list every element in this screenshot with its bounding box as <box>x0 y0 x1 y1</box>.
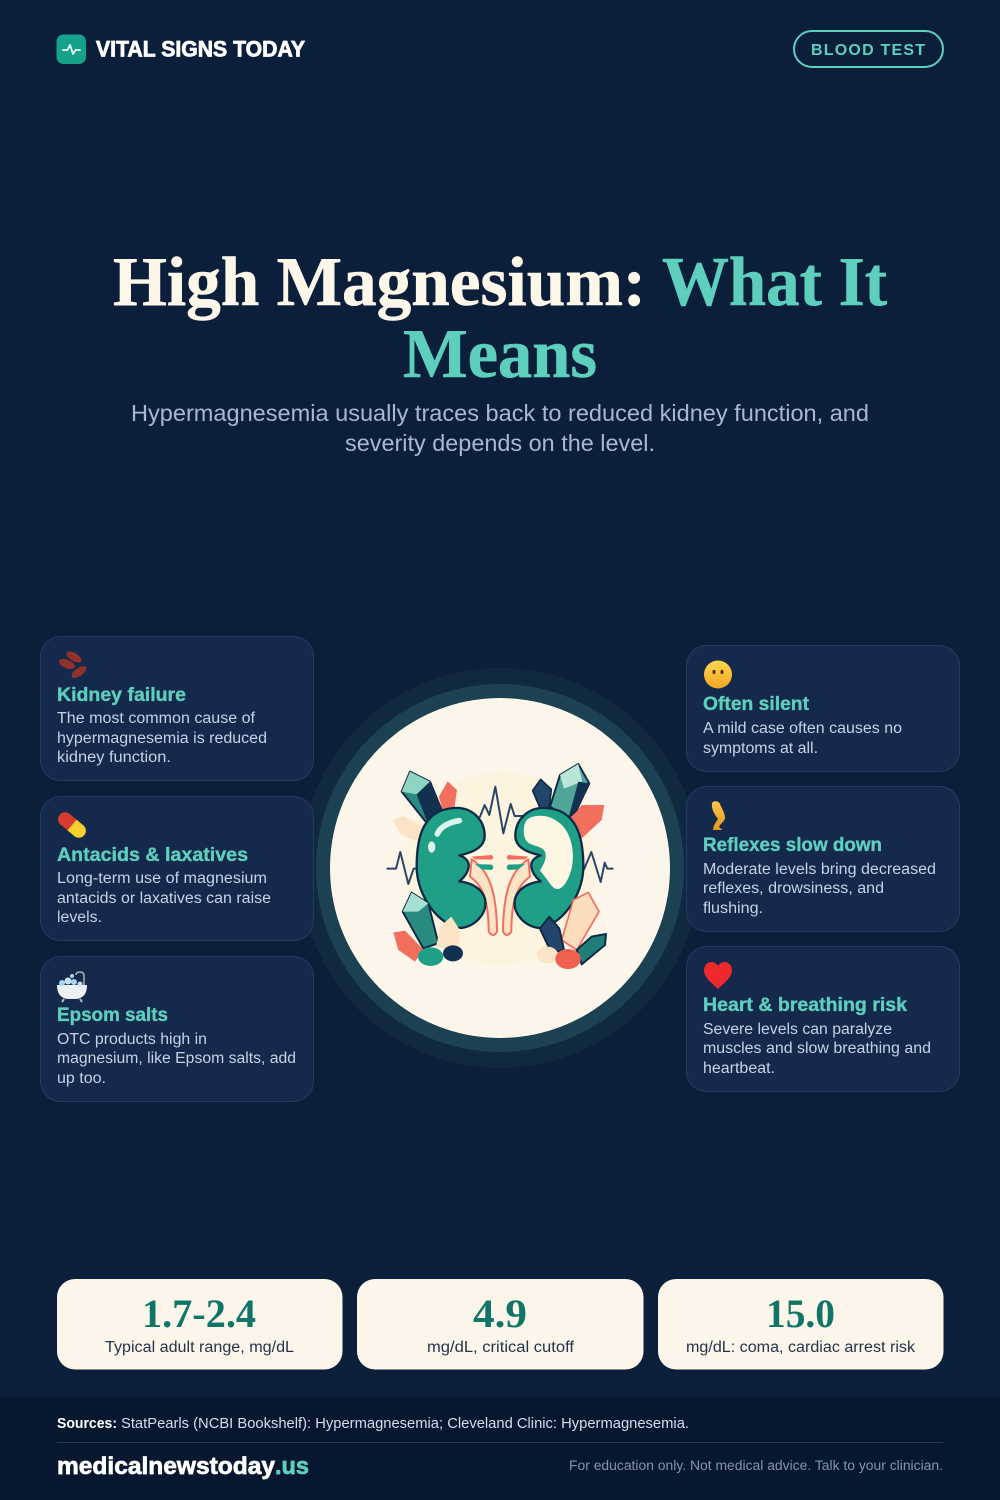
panel: heart and breathing risk: Heart & breathing risk <box>703 995 907 1016</box>
stat: coma risk: 15.0 <box>766 1291 835 1336</box>
panel: often silent: symptoms at all. <box>703 740 818 757</box>
panel: antacids and laxatives <box>40 796 314 940</box>
header brand <box>56 34 305 64</box>
icon: kidney beans <box>58 649 88 680</box>
subtitle: Hypermagnesemia usually traces back to reduced kidney function, and <box>131 400 869 426</box>
panel: often silent: A mild case often causes no <box>703 720 902 737</box>
panel: antacids and laxatives: antacids or laxatives can raise <box>57 890 271 907</box>
panel: often silent: Often silent <box>703 694 810 715</box>
ecg lines <box>480 787 525 833</box>
panel: epsom salts: OTC products high in <box>57 1031 207 1048</box>
panel: kidney failure: Kidney failure <box>57 685 186 706</box>
stat: coma risk: mg/dL: coma, cardiac arrest risk <box>686 1339 915 1356</box>
panel: heart and breathing risk: heartbeat. <box>703 1060 775 1077</box>
title: What It <box>662 244 887 321</box>
stat: critical cutoff: 4.9 <box>473 1291 527 1336</box>
disclaimer: For education only. Not medical advice. Talk to your clinician. <box>569 1458 943 1473</box>
crystals front <box>403 893 438 948</box>
panel: kidney failure <box>40 636 314 780</box>
panel: heart and breathing risk: muscles and slow breathing and <box>703 1040 931 1057</box>
panel: antacids and laxatives: Long-term use of magnesium <box>57 870 267 887</box>
title <box>113 244 887 393</box>
subtitle <box>131 400 869 456</box>
footer brand: medicalnewstoday <box>57 1453 276 1480</box>
panel: reflexes slow down: Reflexes slow down <box>703 835 882 856</box>
stat: typical range: Typical adult range, mg/dL <box>105 1339 294 1356</box>
panel: reflexes slow down: flushing. <box>703 900 763 917</box>
ureters <box>470 859 497 935</box>
stat: coma risk <box>658 1279 944 1370</box>
panel: epsom salts <box>40 956 314 1102</box>
panel: heart and breathing risk: Severe levels can paralyze <box>703 1021 892 1038</box>
ureter connectors <box>472 855 528 860</box>
brand name: VITAL SIGNS TODAY <box>96 36 305 62</box>
panel: often silent <box>686 646 960 772</box>
icon: face without mouth <box>704 660 732 688</box>
panel: antacids and laxatives: levels. <box>57 909 102 926</box>
icon: pulse logo <box>56 34 86 64</box>
icon: leg <box>712 801 725 830</box>
panel: kidney failure: kidney function. <box>57 749 171 766</box>
footer brand: .us <box>275 1453 309 1480</box>
title: High Magnesium: <box>113 244 646 321</box>
panel: reflexes slow down: reflexes, drowsiness, and <box>703 880 884 897</box>
stat: typical range: 1.7-2.4 <box>142 1291 256 1336</box>
icon: pill <box>55 809 89 841</box>
left kidney <box>417 808 485 928</box>
sources: Sources: <box>57 1416 117 1432</box>
panel: heart and breathing risk <box>686 946 960 1092</box>
sources: StatPearls (NCBI Bookshelf): Hypermagnesemia; Cleveland Clinic: Hypermagnesemia. <box>121 1416 689 1432</box>
stat: critical cutoff: mg/dL, critical cutoff <box>427 1339 575 1356</box>
icon: bathtub <box>57 972 87 1002</box>
footer <box>0 1398 1000 1500</box>
panel: reflexes slow down: Moderate levels bring decreased <box>703 861 936 878</box>
stat: critical cutoff <box>357 1279 644 1370</box>
badge: blood test <box>794 31 943 67</box>
panel: kidney failure: The most common cause of <box>57 710 256 727</box>
panel: kidney failure: hypermagnesemia is reduced <box>57 730 267 747</box>
badge: blood test: BLOOD TEST <box>811 42 925 59</box>
crystals behind <box>439 781 457 815</box>
panel: epsom salts: up too. <box>57 1070 106 1087</box>
icon: kidneys and crystals <box>387 764 613 969</box>
subtitle: severity depends on the level. <box>345 430 655 456</box>
stat: typical range <box>57 1279 342 1370</box>
panel: epsom salts: magnesium, like Epsom salts, add <box>57 1050 296 1067</box>
right kidney <box>515 808 583 928</box>
panel: reflexes slow down <box>686 786 960 932</box>
panel: epsom salts: Epsom salts <box>57 1005 168 1026</box>
panel: central kidney illustration <box>300 668 700 1068</box>
panel: antacids and laxatives: Antacids & laxatives <box>57 845 248 866</box>
icon: heart <box>704 962 732 989</box>
title: Means <box>403 316 597 393</box>
